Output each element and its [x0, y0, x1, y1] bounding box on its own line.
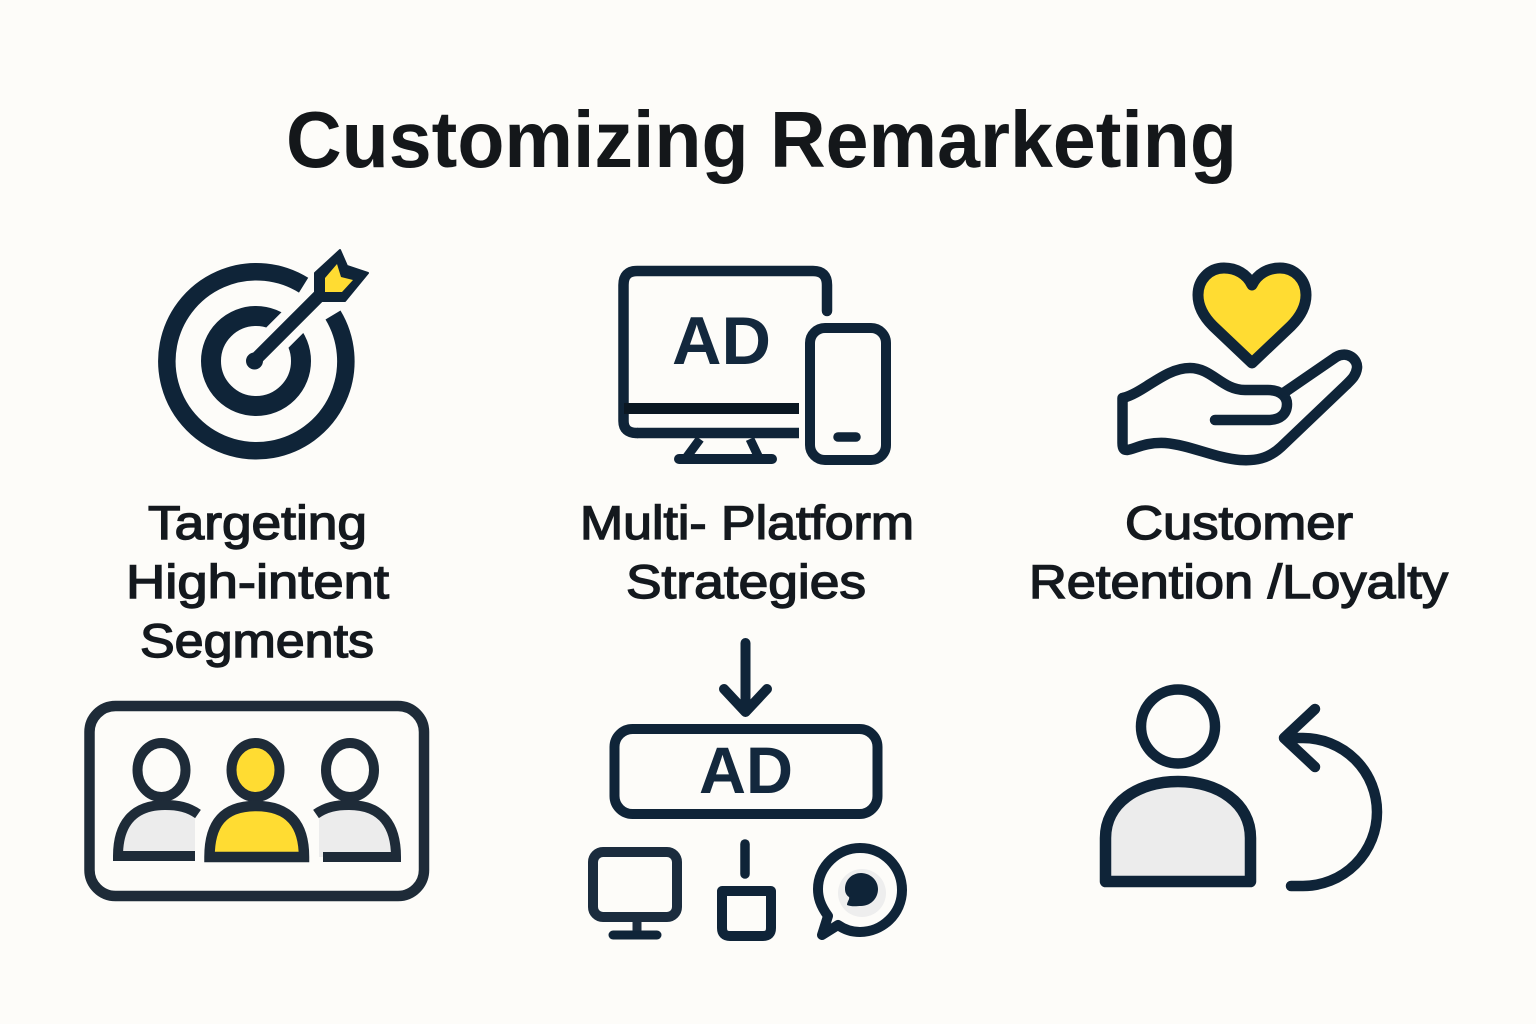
icon: monitor and phone with AD: AD: [672, 303, 771, 379]
small monitor: [593, 852, 677, 935]
person: [1106, 690, 1250, 882]
small square device: [722, 891, 771, 936]
label: customer retention / loyalty: Customer: [1125, 496, 1353, 549]
icon: target with arrow: [167, 250, 368, 451]
label: customer retention / loyalty: Retention /Loyalty: [1029, 555, 1449, 608]
label: multi-platform strategies: [580, 496, 914, 608]
tick line: [740, 844, 750, 874]
person: right grey: [316, 743, 396, 857]
icon: monitor and phone with AD: [624, 271, 886, 460]
person: centre yellow: [210, 743, 304, 857]
person: left grey: [118, 743, 198, 857]
label: targeting high-intent segments: Targeting: [148, 496, 367, 549]
label: targeting high-intent segments: Segments: [140, 614, 374, 667]
label: targeting high-intent segments: High-intent: [126, 555, 389, 608]
label: multi-platform strategies: Strategies: [626, 555, 866, 608]
chat bubble: [818, 848, 902, 935]
arrow: down to ad: [724, 643, 767, 712]
ad box: AD: [699, 733, 793, 807]
icon: hand holding heart: [1122, 268, 1357, 460]
icon: ad distributed across channels: [593, 643, 902, 936]
icon: audience segment panel: [90, 706, 424, 896]
label: multi-platform strategies: Multi- Platform: [580, 496, 914, 549]
ad box: [614, 729, 878, 814]
label: customer retention / loyalty: [1029, 496, 1449, 608]
arrow: return loop: [1284, 709, 1377, 886]
icon: returning customer: [1106, 690, 1377, 886]
label: targeting high-intent segments: [126, 496, 389, 667]
title: Customizing Remarketing: [286, 95, 1237, 184]
